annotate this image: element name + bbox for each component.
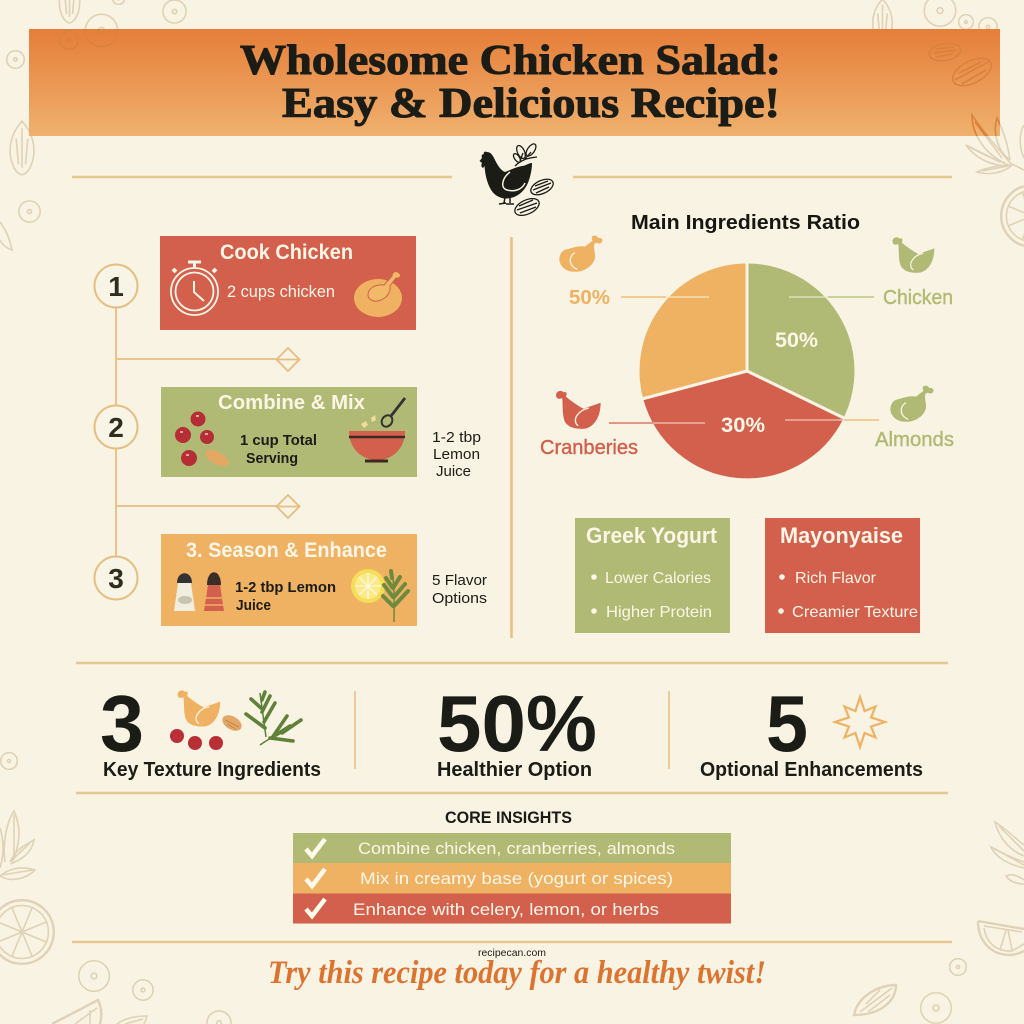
step 1 amount: 2 cups chicken bbox=[227, 282, 335, 301]
insight row 3 bbox=[293, 894, 731, 924]
pie label: almonds: Almonds bbox=[875, 429, 954, 451]
timeline connector bbox=[116, 307, 300, 557]
icon: salt and pepper shakers bbox=[174, 572, 224, 611]
stat: optional enhancements bbox=[700, 679, 923, 781]
icon: cranberries and almond bbox=[175, 412, 231, 469]
mayonnaise benefits: Rich Flavor bbox=[795, 570, 877, 587]
step 2 amount: 1 cup Total bbox=[240, 432, 317, 449]
chart heading: Main Ingredients Ratio bbox=[631, 212, 860, 234]
panel: greek yogurt bbox=[575, 518, 730, 633]
stat: optional enhancements: 5 bbox=[766, 679, 808, 768]
stat: healthier option: Healthier Option bbox=[437, 759, 592, 781]
title: Easy & Delicious Recipe! bbox=[282, 81, 780, 127]
pie value: green 50%: 50% bbox=[775, 329, 818, 352]
side note: lemon juice bbox=[432, 429, 481, 480]
icon: diamond connector 1 bbox=[276, 348, 300, 371]
stat: optional enhancements: Optional Enhancements bbox=[700, 759, 923, 781]
side note: flavor options: Options bbox=[432, 590, 487, 607]
insight row 2 bbox=[293, 863, 731, 894]
step 3 amount bbox=[235, 579, 336, 614]
side note: lemon juice: 1-2 tbp bbox=[432, 429, 481, 446]
mayonnaise benefits: Creamier Texture bbox=[792, 604, 918, 621]
icon: green drumstick bbox=[890, 386, 933, 422]
step number 2 bbox=[94, 406, 138, 448]
step 1 heading: Cook Chicken bbox=[220, 241, 353, 264]
insight row 3: Enhance with celery, lemon, or herbs bbox=[353, 900, 659, 919]
step number 3 bbox=[94, 556, 138, 600]
icon: green hen bbox=[893, 237, 934, 273]
icon: star burst bbox=[835, 697, 885, 747]
insight row 1: Combine chicken, cranberries, almonds bbox=[358, 839, 675, 858]
step 2 amount bbox=[240, 432, 317, 467]
side note: flavor options: 5 Flavor bbox=[432, 572, 487, 589]
pie label: chicken: Chicken bbox=[883, 287, 953, 309]
panel: step 3 season and enhance bbox=[161, 534, 417, 626]
call to action: Try this recipe today for a healthy twist! bbox=[268, 955, 766, 991]
slice: cranberries bbox=[642, 371, 845, 480]
core insights list bbox=[293, 833, 731, 924]
stat: key texture ingredients: 3 bbox=[100, 679, 144, 768]
step 3 amount: 1-2 tbp Lemon bbox=[235, 579, 336, 596]
side note: flavor options bbox=[432, 572, 487, 607]
pie value: red 30%: 30% bbox=[721, 414, 765, 437]
pie label: cranberries: Cranberies bbox=[540, 437, 638, 459]
title bbox=[240, 38, 781, 127]
side note: lemon juice: Juice bbox=[436, 463, 471, 480]
insight row 1 bbox=[293, 833, 731, 863]
title: Wholesome Chicken Salad: bbox=[240, 38, 781, 84]
greek yogurt benefits: Lower Calories bbox=[605, 570, 711, 587]
icon: stopwatch bbox=[171, 262, 218, 315]
step number 1: 1 bbox=[108, 271, 124, 302]
icon: lemon and herb bbox=[351, 569, 408, 622]
greek yogurt benefits bbox=[591, 570, 712, 621]
icon: red hen bbox=[556, 391, 601, 429]
mayonnaise benefits bbox=[778, 570, 918, 621]
panel: mayonnaise bbox=[765, 518, 920, 633]
title banner bbox=[29, 29, 1000, 136]
icon: mixing bowl and spoon bbox=[349, 398, 405, 461]
stat: key texture ingredients bbox=[100, 679, 321, 781]
panel: step 1 cook chicken bbox=[160, 236, 416, 330]
source credit: recipecan.com bbox=[478, 948, 546, 959]
step 3 heading: 3. Season & Enhance bbox=[186, 539, 387, 562]
icon: diamond connector 2 bbox=[276, 495, 300, 518]
step 2 amount: Serving bbox=[246, 450, 298, 467]
icon: roast chicken bbox=[354, 272, 402, 317]
icon: black hen with sprig and almonds bbox=[480, 142, 556, 219]
side note: lemon juice: Lemon bbox=[433, 446, 480, 463]
slice: orange bbox=[638, 262, 747, 399]
insight row 2: Mix in creamy base (yogurt or spices) bbox=[360, 869, 673, 888]
pie chart bbox=[638, 262, 856, 480]
greek yogurt benefits: Higher Protein bbox=[606, 604, 712, 621]
core insights heading: CORE INSIGHTS bbox=[445, 808, 572, 827]
step 2 heading: Combine & Mix bbox=[218, 392, 365, 414]
greek yogurt heading: Greek Yogurt bbox=[586, 523, 718, 548]
step number 2: 2 bbox=[108, 412, 124, 443]
step 3 amount: Juice bbox=[236, 597, 271, 614]
stat: healthier option: 50% bbox=[437, 679, 597, 768]
step number 3: 3 bbox=[108, 563, 124, 594]
mayonnaise heading: Mayonyaise bbox=[780, 523, 903, 548]
stat: key texture ingredients: Key Texture Ingredients bbox=[103, 759, 321, 781]
step number 1 bbox=[94, 264, 138, 308]
icon: chicken, almond, berries and herb bbox=[170, 690, 302, 750]
icon: orange drumstick bbox=[559, 236, 602, 272]
panel: step 2 combine and mix bbox=[161, 387, 417, 477]
pie label: orange 50%: 50% bbox=[569, 287, 610, 309]
slice: chicken bbox=[747, 262, 856, 419]
